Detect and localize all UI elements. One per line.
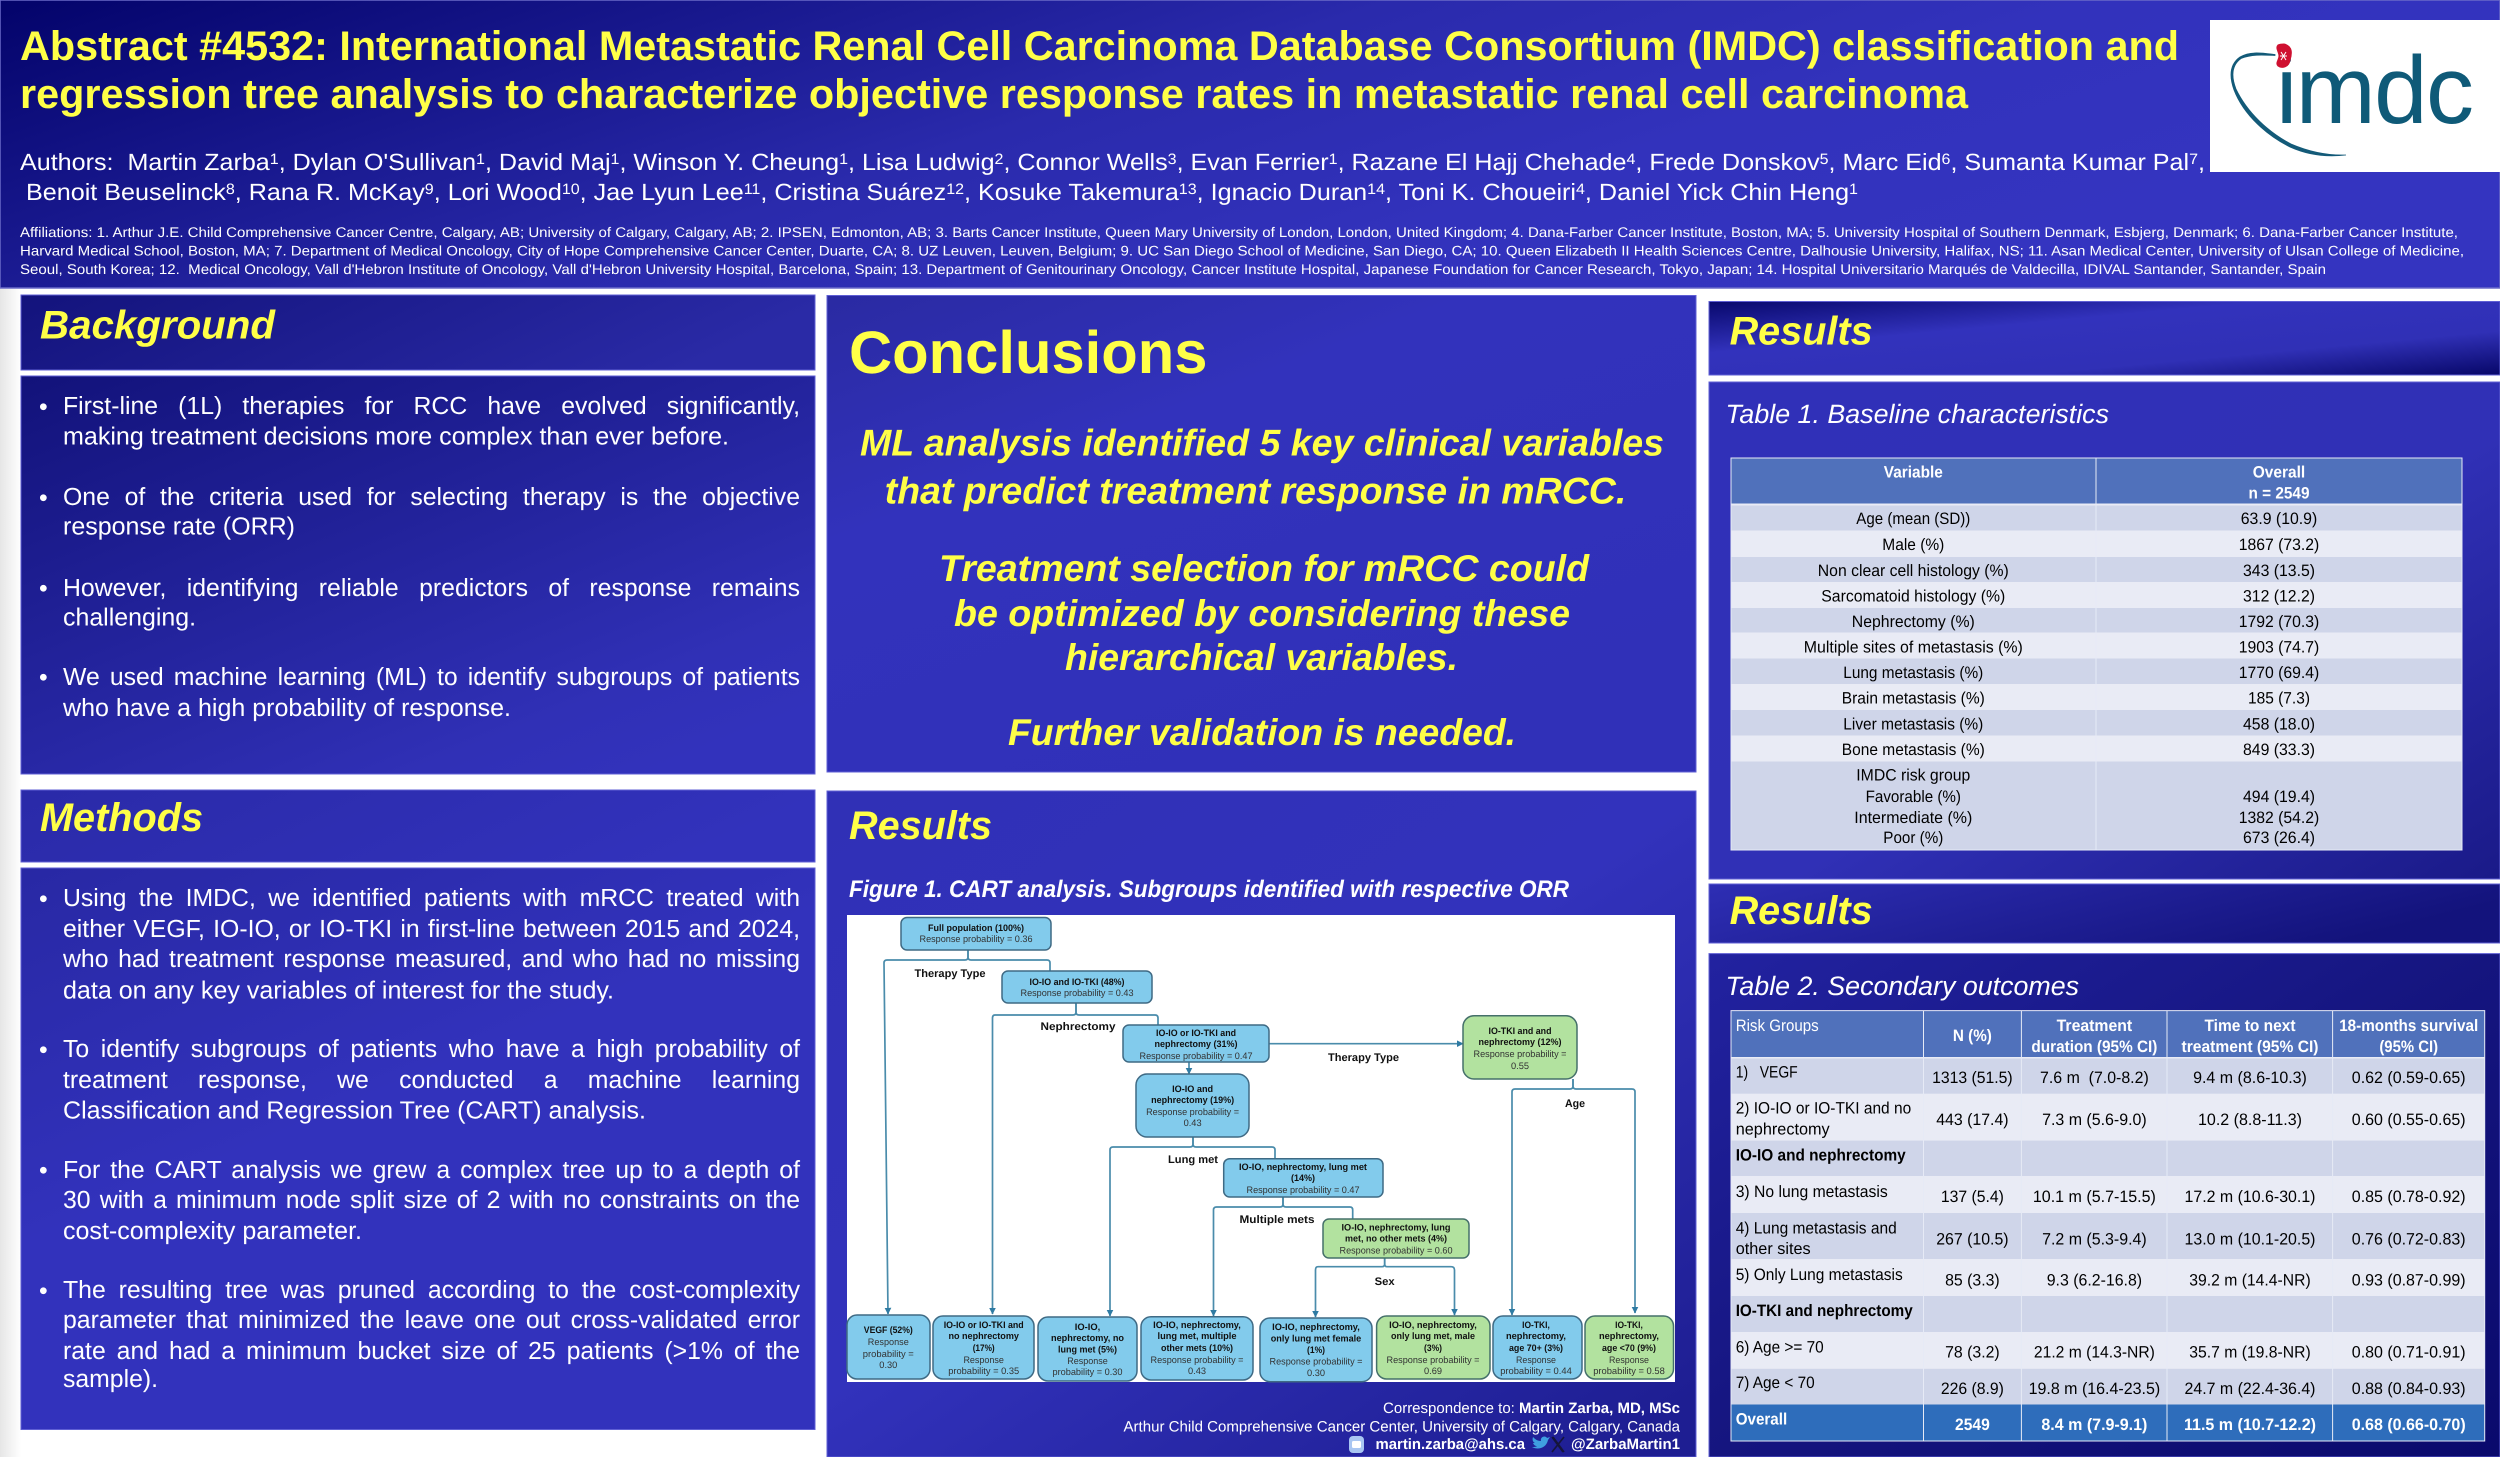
table: secondary outcomes: 24.7 m (22.4-36.4): [2184, 1380, 2316, 1398]
title: regression tree analysis to characterize objective response rates in metastatic renal cell carcinoma: [20, 71, 1969, 117]
table: secondary outcomes: 19.8 m (16.4-23.5): [2029, 1380, 2160, 1398]
node: IO-TKI age under 70: [1585, 1316, 1674, 1379]
table: secondary outcomes: 11.5 m (10.7-12.2): [2184, 1416, 2316, 1434]
node: IO-TKI and nephrectomy: [1463, 1016, 1577, 1079]
node: IO-TKI age 70+: nephrectomy,: [1506, 1330, 1566, 1341]
node: only lung met male: Response probability =: [1386, 1354, 1480, 1365]
node: multiple other mets: Response probability =: [1150, 1354, 1244, 1365]
table: secondary outcomes: 78 (3.2): [1945, 1344, 2000, 1362]
table: baseline characteristics: Non clear cell histology (%): [1818, 562, 2009, 580]
table: secondary outcomes: 18-months survival: [2339, 1017, 2478, 1035]
node: IO-IO and IO-TKI: [1002, 971, 1152, 1003]
node: multiple other mets: lung met, multiple: [1158, 1330, 1236, 1341]
table: baseline characteristics: 1770 (69.4): [2239, 664, 2319, 682]
conclusion: treatment selection: be optimized by considering these: [954, 592, 1570, 634]
conclusion: key variables: that predict treatment response in mRCC.: [885, 470, 1626, 512]
table: secondary outcomes: 17.2 m (10.6-30.1): [2184, 1188, 2316, 1206]
table: secondary outcomes: 0.76 (0.72-0.83): [2352, 1230, 2466, 1248]
table: secondary outcomes: 85 (3.3): [1945, 1272, 2000, 1290]
conclusion: treatment selection: Treatment selection for mRCC could: [939, 547, 1590, 589]
panel: methods heading: [21, 790, 815, 862]
bullet: pruning: parameter that minimized the leave one out cross-validated error: [63, 1307, 800, 1334]
bullet: pruning: rate and had a minimum bucket size of 25 patients (>1% of the: [63, 1338, 800, 1365]
labels: split variables: Lung met: [1168, 1154, 1218, 1166]
bullet: pruning: The resulting tree was pruned according to the cost-complexity: [63, 1277, 800, 1304]
affiliations: Seoul, South Korea; 12. Medical Oncology, Vall d'Hebron Institute of Oncology, Vall d'Hebron University Hospital, Barcelona, Spain; 13. Department of Genitourinary Oncology, Cancer Institute Hospital, Japanese Foundation for Cancer Research, Tokyo, Japan; 14. Hospital Universitario Marqués de Valdecilla, IDIVAL Santander, Santander, Spain: [20, 261, 2326, 277]
node: IO-IO or IO-TKI and nephrectomy: IO-IO or IO-TKI and: [1156, 1027, 1236, 1038]
node: IO-IO and nephrectomy: [1136, 1074, 1249, 1137]
node: only lung met female: 0.30: [1307, 1367, 1325, 1378]
bullet: machine learning: •: [39, 665, 48, 692]
node: IO-TKI age under 70: probability = 0.58: [1593, 1365, 1665, 1376]
table: baseline characteristics: Nephrectomy (%): [1852, 613, 1975, 631]
table: baseline characteristics: 1792 (70.3): [2239, 613, 2319, 631]
correspondence: Correspondence to: Martin Zarba, MD, MSc: [1383, 1400, 1680, 1417]
table: secondary outcomes: Overall: [1736, 1411, 1787, 1429]
bullet: CART analysis: Classification and Regression Tree (CART) analysis.: [63, 1097, 646, 1124]
node: no lung met: probability = 0.30: [1052, 1366, 1122, 1377]
node: lung met, no other mets: IO-IO, nephrectomy, lung: [1342, 1222, 1451, 1233]
node: IO-IO and nephrectomy: IO-IO and: [1172, 1083, 1213, 1094]
heading: Results: Results: [1730, 309, 1873, 353]
table: secondary outcomes: 9.4 m (8.6-10.3): [2193, 1069, 2307, 1087]
bullet: identifying predictors: challenging.: [63, 605, 196, 632]
bullet: tree growth: For the CART analysis we grew a complex tree up to a depth of: [63, 1157, 800, 1184]
node: no lung met: Response: [1067, 1355, 1108, 1366]
table: secondary outcomes: 6) Age >= 70: [1736, 1339, 1824, 1357]
logo: imdc: imdc: [2276, 37, 2474, 144]
bullet: identifying predictors: However, identifying reliable predictors of response remains: [63, 575, 800, 602]
heading: table 1 title: Table 1. Baseline characteristics: [1726, 399, 2109, 429]
node: IO-TKI age under 70: age <70 (9%): [1602, 1342, 1656, 1353]
table: baseline characteristics: Sarcomatoid histology (%): [1821, 588, 2005, 606]
table: secondary outcomes: 7) Age < 70: [1736, 1374, 1815, 1392]
node: IO-TKI and nephrectomy: Response probability =: [1474, 1048, 1567, 1059]
conclusion: treatment selection: [939, 547, 1590, 678]
table: baseline characteristics: Bone metastasis (%): [1842, 741, 1985, 759]
title: [20, 23, 2179, 117]
bullet: first-line therapies: [39, 391, 800, 451]
node: VEGF: probability =: [863, 1348, 914, 1359]
labels: split variables: [914, 968, 1585, 1288]
correspondence: [1124, 1400, 1681, 1453]
panel: table 2: [1709, 954, 2500, 1457]
table: secondary outcomes: 0.85 (0.78-0.92): [2352, 1188, 2466, 1206]
node: only lung met female: [1260, 1318, 1372, 1382]
table: baseline characteristics: [1731, 458, 2462, 850]
heading: Conclusions: Conclusions: [849, 319, 1208, 386]
table: secondary outcomes: N (%): [1953, 1027, 1992, 1045]
table: secondary outcomes: IO-IO and nephrectomy: [1736, 1146, 1906, 1164]
node: no lung met: lung met (5%): [1058, 1344, 1117, 1355]
node: full population: Full population (100%): [928, 922, 1024, 933]
table: baseline characteristics: Variable: [1884, 464, 1943, 482]
labels: split variables: Nephrectomy: [1040, 1021, 1116, 1033]
labels: split variables: Multiple mets: [1240, 1214, 1314, 1226]
bullet: objective response rate: [39, 482, 800, 540]
bullet: first-line therapies: •: [39, 394, 48, 421]
bullet: first-line therapies: making treatment decisions more complex than ever before.: [63, 424, 729, 451]
panel: background heading: [21, 295, 815, 370]
node: IO-IO, nephrectomy, lung met: [1224, 1159, 1383, 1197]
table: baseline characteristics: 494 (19.4): [2243, 788, 2315, 806]
table: baseline characteristics: Lung metastasis (%): [1843, 664, 1983, 682]
table: secondary outcomes: 0.88 (0.84-0.93): [2352, 1380, 2466, 1398]
node: lung met, no other mets: met, no other mets (4%): [1345, 1233, 1447, 1244]
arrow: nephrectomy split: [992, 1003, 1076, 1314]
table: baseline characteristics: n = 2549: [2248, 485, 2310, 503]
node: no lung met: [1038, 1317, 1137, 1381]
labels: split variables: Sex: [1375, 1276, 1396, 1288]
node: multiple other mets: [1141, 1317, 1253, 1380]
node: VEGF: [847, 1315, 930, 1379]
table: secondary outcomes: (95% CI): [2379, 1038, 2438, 1056]
icon: twitter bird: [1532, 1437, 1550, 1449]
node: no nephrectomy: Response: [963, 1354, 1004, 1365]
node: IO-TKI age under 70: Response: [1609, 1354, 1649, 1365]
header banner: [0, 0, 2500, 288]
labels: split variables: Age: [1565, 1098, 1585, 1110]
node: full population: Response probability = 0.36: [920, 933, 1032, 944]
table: baseline characteristics: 185 (7.3): [2248, 690, 2310, 708]
node: lung met, no other mets: [1323, 1219, 1469, 1258]
node: IO-TKI and nephrectomy: 0.55: [1511, 1060, 1529, 1071]
node: IO-TKI age under 70: IO-TKI,: [1615, 1319, 1643, 1330]
table: secondary outcomes: 0.68 (0.66-0.70): [2352, 1416, 2466, 1434]
table: baseline characteristics: 1903 (74.7): [2239, 638, 2319, 656]
bullet: CART analysis: To identify subgroups of patients who have a high probability of: [63, 1036, 800, 1063]
table: secondary outcomes: 35.7 m (19.8-NR): [2189, 1344, 2311, 1362]
table: secondary outcomes: 443 (17.4): [1936, 1111, 2009, 1129]
node: IO-TKI age 70+: probability = 0.44: [1500, 1365, 1572, 1376]
node: multiple other mets: 0.43: [1188, 1365, 1206, 1376]
bullet: patient identification: data on any key variables of interest for the study.: [63, 977, 614, 1004]
authors: [20, 149, 2205, 205]
table: secondary outcomes: 10.2 (8.8-11.3): [2198, 1111, 2302, 1129]
node: no nephrectomy: IO-IO or IO-TKI and: [944, 1319, 1024, 1330]
node: full population: [901, 918, 1051, 950]
bullet: machine learning: who have a high probability of response.: [62, 695, 511, 722]
icon: X logo: [1552, 1437, 1564, 1452]
node: IO-IO and IO-TKI: IO-IO and IO-TKI (48%): [1030, 976, 1124, 987]
correspondence: @ZarbaMartin1: [1571, 1436, 1680, 1453]
table: secondary outcomes: 10.1 m (5.7-15.5): [2033, 1188, 2156, 1206]
icon: email: [1349, 1436, 1364, 1453]
bullet: pruning: [39, 1275, 800, 1393]
node: VEGF: VEGF (52%): [864, 1324, 913, 1335]
bullet: CART analysis: •: [39, 1037, 48, 1064]
panel: background body: [21, 376, 815, 774]
table: secondary outcomes: 9.3 (6.2-16.8): [2047, 1272, 2142, 1290]
table: secondary outcomes: 226 (8.9): [1941, 1380, 2004, 1398]
table: secondary outcomes: treatment (95% CI): [2182, 1038, 2318, 1056]
table: secondary outcomes: 0.60 (0.55-0.65): [2352, 1111, 2466, 1129]
panel: conclusions: [827, 296, 1696, 772]
arrow: sex split: [1316, 1258, 1385, 1317]
node: only lung met male: [1377, 1316, 1490, 1379]
bullet: tree growth: [39, 1155, 800, 1245]
table: secondary outcomes: 0.62 (0.59-0.65): [2352, 1069, 2466, 1087]
table: secondary outcomes: [1731, 1011, 2485, 1441]
table: secondary outcomes: 8.4 m (7.9-9.1): [2041, 1416, 2147, 1434]
table: baseline characteristics: Favorable (%): [1866, 788, 1961, 806]
node: no nephrectomy: (17%): [973, 1342, 995, 1353]
node: IO-IO and nephrectomy: nephrectomy (19%): [1151, 1094, 1234, 1105]
table: secondary outcomes: 39.2 m (14.4-NR): [2189, 1272, 2311, 1290]
node: IO-IO and IO-TKI: Response probability = 0.43: [1020, 987, 1134, 998]
table: baseline characteristics: 63.9 (10.9): [2241, 510, 2317, 528]
table: secondary outcomes: 7.6 m (7.0-8.2): [2040, 1069, 2149, 1087]
correspondence: Arthur Child Comprehensive Cancer Center, University of Calgary, Calgary, Canada: [1124, 1419, 1681, 1436]
node: no nephrectomy: no nephrectomy: [948, 1330, 1020, 1341]
node: only lung met male: only lung met, male: [1391, 1330, 1475, 1341]
affiliations: Affiliations: 1. Arthur J.E. Child Comprehensive Cancer Centre, Calgary, AB; University of Calgary, Calgary, AB; 2. IPSEN, Edmonton, AB; 3. Barts Cancer Institute, Queen Mary University of London, London, United Kingdom; 4. Dana-Farber Cancer Institute, Boston, MA; 5. University Hospital of Southern Denmark, Esbjerg, Denmark; 6. Dana-Farber Cancer Institute,: [20, 224, 2458, 240]
table: baseline characteristics: 1382 (54.2): [2239, 809, 2319, 827]
bullet: pruning: sample).: [63, 1366, 158, 1393]
node: multiple other mets: other mets (10%): [1161, 1342, 1233, 1353]
table: secondary outcomes: Time to next: [2204, 1017, 2296, 1035]
table: secondary outcomes: 0.80 (0.71-0.91): [2352, 1344, 2466, 1362]
table: secondary outcomes: 2549: [1955, 1416, 1990, 1434]
heading: Results: Results: [849, 804, 992, 848]
table: secondary outcomes: nephrectomy: [1736, 1121, 1830, 1139]
bullet: patient identification: who had treatment response measured, and who had no missing: [63, 946, 800, 973]
table: secondary outcomes: 3) No lung metastasis: [1736, 1183, 1888, 1201]
node: VEGF: Response: [868, 1336, 909, 1347]
node: IO-TKI and nephrectomy: IO-TKI and and: [1488, 1025, 1552, 1036]
table: baseline characteristics: Multiple sites of metastasis (%): [1804, 638, 2023, 656]
arrow: age split: [1512, 1079, 1573, 1315]
logo: imdc: [2210, 20, 2500, 172]
bullet: patient identification: [39, 883, 800, 1004]
node: only lung met male: IO-IO, nephrectomy,: [1389, 1319, 1477, 1330]
table: secondary outcomes: Risk Groups: [1736, 1017, 1819, 1035]
heading: table 2 title: Table 2. Secondary outcomes: [1726, 971, 2079, 1001]
table: baseline characteristics: 1867 (73.2): [2239, 536, 2319, 554]
conclusion: key variables: [860, 422, 1664, 512]
node: lung met, no other mets: Response probability = 0.60: [1340, 1245, 1452, 1256]
panel: methods body: [21, 868, 815, 1430]
node: multiple other mets: IO-IO, nephrectomy,: [1153, 1319, 1241, 1330]
arrow: lung met split: [1110, 1137, 1193, 1316]
node: IO-TKI age under 70: nephrectomy,: [1599, 1330, 1659, 1341]
node: only lung met female: only lung met female: [1271, 1333, 1361, 1344]
conclusion: further validation: Further validation is needed.: [1008, 711, 1516, 753]
node: IO-TKI age 70+: Response: [1516, 1354, 1556, 1365]
labels: split variables: Therapy Type: [1328, 1052, 1399, 1064]
bullet: machine learning: [39, 662, 800, 722]
table: secondary outcomes: 1) VEGF: [1736, 1064, 1798, 1082]
title: Abstract #4532: International Metastatic Renal Cell Carcinoma Database Consortium (IMDC) classification and: [20, 23, 2179, 69]
table: secondary outcomes: 21.2 m (14.3-NR): [2034, 1344, 2155, 1362]
bullet: first-line therapies: First-line (1L) therapies for RCC have evolved significantly,: [63, 393, 800, 420]
heading: Results: Results: [1730, 889, 1873, 933]
node: IO-TKI age 70+: [1493, 1316, 1582, 1379]
conclusion: key variables: ML analysis identified 5 key clinical variables: [860, 422, 1664, 464]
node: VEGF: 0.30: [879, 1359, 897, 1370]
panel: results heading right top: [1709, 302, 2500, 375]
node: no nephrectomy: [933, 1316, 1034, 1379]
arrow: therapy type to IO-TKI: [1269, 1043, 1463, 1045]
node: IO-IO or IO-TKI and nephrectomy: [1123, 1025, 1269, 1062]
arrow: multiple mets split: [1214, 1197, 1283, 1316]
bullet: patient identification: •: [39, 886, 48, 913]
table: secondary outcomes: 7.3 m (5.6-9.0): [2042, 1111, 2147, 1129]
node: only lung met female: Response probability =: [1270, 1356, 1363, 1367]
table: baseline characteristics: Intermediate (%): [1854, 809, 1972, 827]
panel: results heading right lower: [1709, 884, 2500, 943]
table: baseline characteristics: Poor (%): [1883, 829, 1943, 847]
chart: CART decision tree: [847, 915, 1675, 1382]
bullet: CART analysis: [39, 1034, 800, 1124]
table: baseline characteristics: Overall: [2253, 464, 2305, 482]
affiliations: [20, 224, 2464, 277]
panel: results figure: [827, 791, 1696, 1457]
heading: Background: Background: [40, 304, 277, 348]
table: secondary outcomes: 4) Lung metastasis and: [1736, 1219, 1897, 1237]
table: baseline characteristics: 343 (13.5): [2243, 562, 2315, 580]
node: IO-IO, nephrectomy, lung met: (14%): [1291, 1172, 1315, 1183]
table: baseline characteristics: 849 (33.3): [2243, 741, 2315, 759]
node: no nephrectomy: probability = 0.35: [948, 1365, 1019, 1376]
table: secondary outcomes: 2) IO-IO or IO-TKI and no: [1736, 1100, 1911, 1118]
node: IO-IO, nephrectomy, lung met: Response probability = 0.47: [1246, 1184, 1360, 1195]
bullet: tree growth: cost-complexity parameter.: [63, 1218, 362, 1245]
node: no lung met: IO-IO,: [1075, 1321, 1100, 1332]
table: baseline characteristics: 458 (18.0): [2243, 715, 2315, 733]
table: secondary outcomes: 5) Only Lung metastasis: [1736, 1266, 1903, 1284]
table: secondary outcomes: duration (95% CI): [2031, 1038, 2157, 1056]
table: baseline characteristics: Liver metastasis (%): [1843, 715, 1983, 733]
node: IO-TKI and nephrectomy: nephrectomy (12%): [1478, 1036, 1562, 1047]
node: IO-TKI age 70+: IO-TKI,: [1522, 1319, 1550, 1330]
bullet: CART analysis: treatment response, we conducted a machine learning: [63, 1067, 800, 1094]
bullet: identifying predictors: •: [39, 576, 48, 602]
labels: split variables: Therapy Type: [914, 968, 986, 980]
authors: Benoit Beuselinck 8, Rana R. McKay 9, Lori Wood 10, Jae Lyun Lee 11, Cristina Suárez 12, Kosuke Takemura 13, Ignacio Duran 14, Toni K. Choueiri 4, Daniel Yick Chin Heng 1: [26, 179, 1858, 205]
node: only lung met female: (1%): [1307, 1344, 1325, 1355]
table: baseline characteristics: Male (%): [1882, 536, 1944, 554]
bullet: objective response rate: •: [39, 485, 48, 512]
node: IO-IO or IO-TKI and nephrectomy: Response probability = 0.47: [1140, 1050, 1252, 1061]
conclusion: treatment selection: hierarchical variables.: [1065, 636, 1458, 678]
correspondence: martin.zarba@ahs.ca: [1376, 1436, 1526, 1453]
node: IO-IO and nephrectomy: Response probability =: [1146, 1106, 1240, 1117]
bullet: patient identification: Using the IMDC, we identified patients with mRCC treated with: [63, 885, 800, 912]
table: baseline characteristics: Age (mean (SD)): [1856, 510, 1970, 528]
table: secondary outcomes: 1313 (51.5): [1932, 1069, 2013, 1087]
affiliations: Harvard Medical School, Boston, MA; 7. Department of Medical Oncology, City of Hope Comprehensive Cancer Center, Duarte, CA; 8. UZ Leuven, Leuven, Belgium; 9. UC San Diego School of Medicine, San Diego, CA; 10. Queen Elizabeth II Health Sciences Centre, Dalhousie University, Halifax, NS; 11. Asan Medical Center, University of Ulsan College of Medicine,: [20, 242, 2464, 258]
table: baseline characteristics: 673 (26.4): [2243, 829, 2315, 847]
node: IO-IO or IO-TKI and nephrectomy: nephrectomy (31%): [1154, 1038, 1238, 1049]
table: secondary outcomes: 13.0 m (10.1-20.5): [2184, 1230, 2316, 1248]
arrow: to IO-IO and nephrectomy: [1188, 1062, 1190, 1074]
table: baseline characteristics: Brain metastasis (%): [1842, 690, 1985, 708]
table: secondary outcomes: 0.93 (0.87-0.99): [2352, 1272, 2466, 1290]
node: only lung met male: 0.69: [1424, 1365, 1442, 1376]
table: baseline characteristics: 312 (12.2): [2243, 588, 2315, 606]
node: IO-IO and nephrectomy: 0.43: [1184, 1117, 1202, 1128]
arrow: therapy type split: [884, 950, 968, 1314]
table: secondary outcomes: other sites: [1736, 1240, 1811, 1258]
authors: Authors: Martin Zarba 1, Dylan O'Sullivan 1, David Maj 1, Winson Y. Cheung 1, Lisa Ludwig 2, Connor Wells 3, Evan Ferrier 1, Razane El Hajj Chehade 4, Frede Donskov 5, Marc Eid 6, Sumanta Kumar Pal 7,: [20, 149, 2205, 175]
bullet: machine learning: We used machine learning (ML) to identify subgroups of patients: [63, 664, 800, 691]
table: baseline characteristics: IMDC risk group: [1856, 767, 1970, 785]
table: secondary outcomes: 137 (5.4): [1941, 1188, 2004, 1206]
table: secondary outcomes: Treatment: [2057, 1017, 2133, 1035]
node: no lung met: nephrectomy, no: [1051, 1332, 1124, 1343]
node: IO-IO, nephrectomy, lung met: IO-IO, nephrectomy, lung met: [1239, 1161, 1367, 1172]
bullet: patient identification: either VEGF, IO-IO, or IO-TKI in first-line between 2015 and 2024,: [63, 916, 800, 943]
panel: table 1: [1709, 382, 2500, 879]
bullet: objective response rate: One of the criteria used for selecting therapy is the objective: [63, 484, 800, 511]
figure caption: Figure 1. CART analysis. Subgroups identified with respective ORR: [849, 876, 1570, 903]
node: only lung met female: IO-IO, nephrectomy,: [1272, 1321, 1360, 1332]
bullet: identifying predictors: [39, 573, 800, 632]
node: only lung met male: (3%): [1424, 1342, 1442, 1353]
bullet: tree growth: •: [39, 1157, 48, 1184]
table: secondary outcomes: 267 (10.5): [1936, 1230, 2009, 1248]
heading: Methods: Methods: [40, 796, 203, 840]
bullet: tree growth: 30 with a minimum node split size of 2 with no constraints on the: [63, 1187, 800, 1214]
table: secondary outcomes: IO-TKI and nephrectomy: [1736, 1302, 1913, 1320]
bullet: objective response rate: response rate (ORR): [63, 514, 295, 540]
node: IO-TKI age 70+: age 70+ (3%): [1509, 1342, 1563, 1353]
table: secondary outcomes: 7.2 m (5.3-9.4): [2042, 1230, 2147, 1248]
bullet: pruning: •: [39, 1278, 48, 1305]
